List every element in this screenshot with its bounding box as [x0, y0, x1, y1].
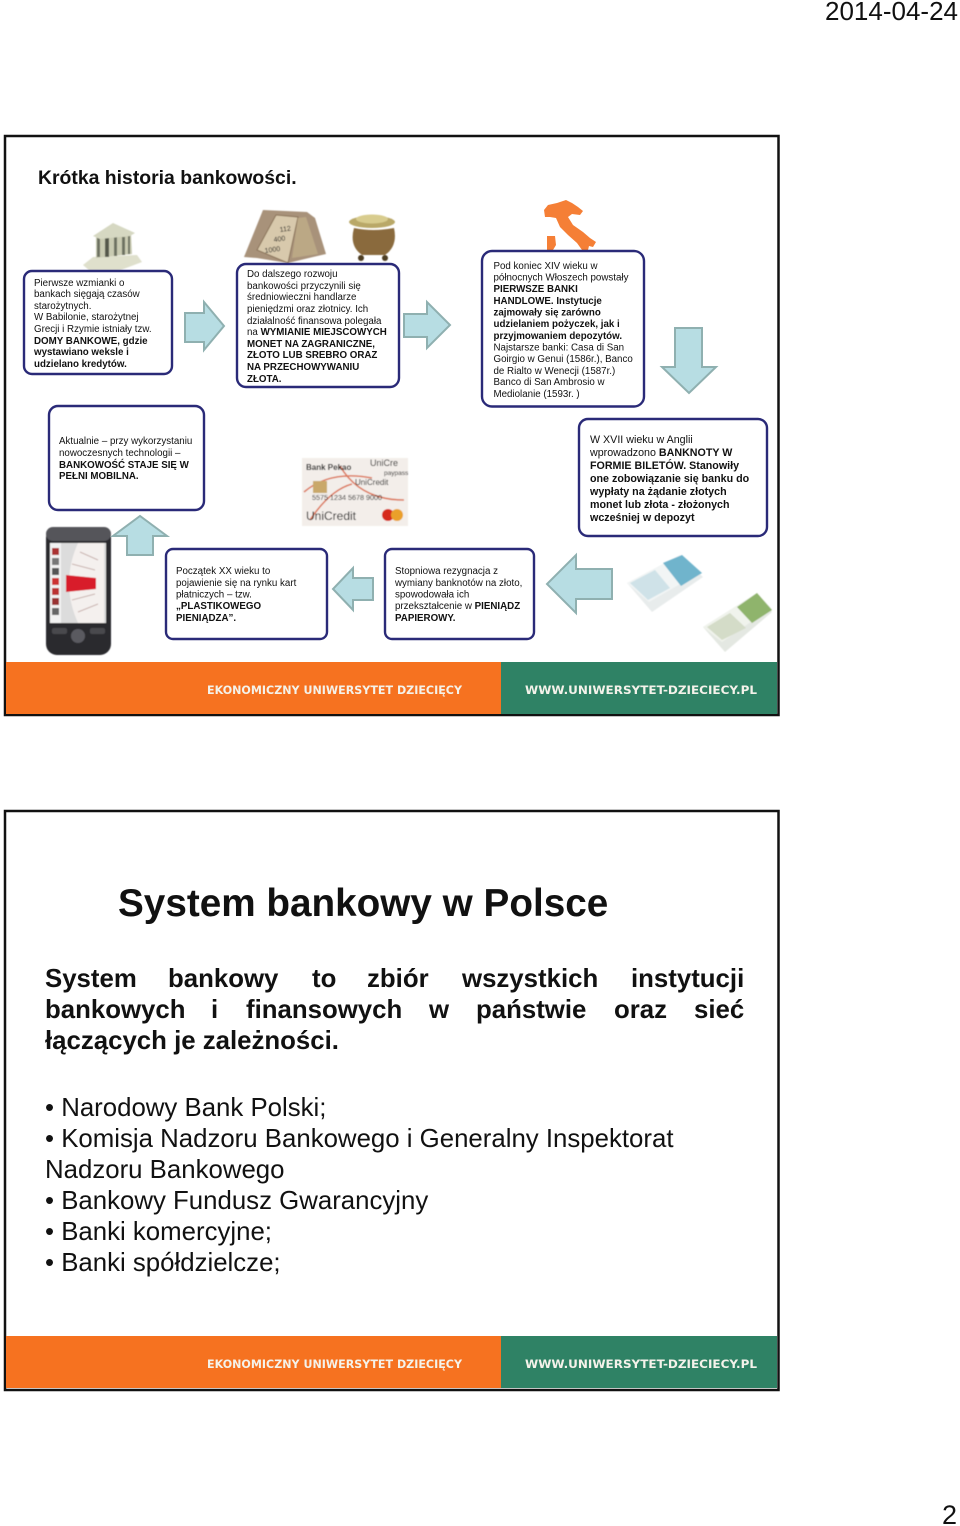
icon: map of Italy [544, 200, 596, 250]
text box: medieval money changers: NA PRZECHOWYWANIU [247, 362, 359, 373]
definition paragraph: wszystkich [461, 965, 598, 993]
arrow: left large [547, 555, 612, 613]
text box: medieval money changers: MONET NA ZAGRANICZNE, [247, 339, 375, 350]
text box: paper money: wymiany banknotów na złoto, [394, 578, 522, 589]
icon: payment card [302, 458, 409, 526]
text box: mobile banking: Aktualnie – przy wykorzystaniu [59, 436, 192, 447]
arrow: left small [333, 568, 373, 610]
icon: pot of gold [349, 214, 395, 261]
icon: gold bars: 112 [279, 225, 291, 234]
bullet list: • Bankowy Fundusz Gwarancyjny [45, 1187, 428, 1215]
definition paragraph: oraz [614, 996, 667, 1024]
bullet list: • Narodowy Bank Polski; [45, 1094, 326, 1122]
text box: paper money: spowodowała ich [395, 590, 469, 600]
text box: ancient banks: udzielano kredytów. [34, 359, 127, 370]
title: Krótka historia bankowości. [38, 167, 297, 189]
heading: System bankowy w Polsce [118, 882, 608, 925]
text box: ancient banks: bankach sięgają czasów [34, 289, 141, 300]
text box: first merchant banks: udzielaniem pożyczek, jak i [494, 319, 620, 330]
definition paragraph: bankowy [168, 965, 279, 993]
text box: medieval money changers: ZŁOTO LUB SREBRO ORAZ [247, 350, 377, 361]
text box: banknotes as tickets: W XVII wieku w Anglii [590, 434, 693, 446]
text box: ancient banks: starożytnych. [34, 301, 91, 312]
definition paragraph: bankowych [45, 996, 186, 1024]
text box: paper money: przekształcenie w PIENIĄDZ [395, 601, 520, 612]
icon: bank building [83, 223, 142, 271]
icon: payment card: UniCredit [306, 509, 357, 523]
footer band: WWW.UNIWERSYTET-DZIECIECY.PL [525, 1357, 758, 1371]
icon: payment card: Bank Pekao [306, 463, 351, 472]
text box: medieval money changers: pieniędzmi oraz złotnicy. Ich [247, 304, 368, 315]
text box: mobile banking: BANKOWOŚĆ STAJE SIĘ W [59, 459, 190, 471]
definition paragraph: i [211, 996, 218, 1024]
text box: plastic money: pojawienie się na rynku kart [176, 578, 297, 589]
text box: medieval money changers: na WYMIANIE MIEJSCOWYCH [247, 327, 387, 338]
text box: paper money: PAPIEROWY. [395, 613, 456, 624]
text box: banknotes as tickets: wypłaty na żądanie złotych [589, 486, 727, 498]
text box: medieval money changers: bankowości przyczynili się [247, 281, 361, 292]
text box: medieval money changers [237, 264, 399, 387]
definition paragraph: zbiór [367, 965, 429, 993]
text box: medieval money changers: Do dalszego rozwoju [247, 269, 338, 280]
text box: ancient banks [24, 271, 172, 374]
panel: slide 2 banking system in Poland [5, 811, 778, 1390]
definition paragraph: sieć [694, 996, 744, 1024]
icon: payment card: UniCre [370, 458, 398, 468]
text box: banknotes as tickets: monet lub złota - złożonych [590, 499, 730, 511]
icon: banknote stack green [703, 593, 772, 652]
text box: mobile banking: PEŁNI MOBILNA. [59, 471, 139, 482]
text box: medieval money changers: działalność finansowa polegała [247, 316, 382, 327]
icon: gold bars [244, 210, 326, 263]
text box: first merchant banks: HANDLOWE. Instytucje [494, 296, 602, 307]
footer band [6, 662, 777, 714]
footer band: WWW.UNIWERSYTET-DZIECIECY.PL [525, 683, 758, 697]
footer band: EKONOMICZNY UNIWERSYTET DZIECIĘCY [207, 683, 463, 697]
text box: first merchant banks: Mediolanie (1593r. ) [494, 389, 580, 400]
text box: first merchant banks: Najstarsze banki: Casa di San [494, 342, 624, 354]
arrow: up [113, 516, 167, 555]
text box: first merchant banks: Pod koniec XIV wieku w [494, 261, 599, 272]
text box: first merchant banks: Goirgio w Genui (1586r.), Banco [494, 354, 633, 365]
definition paragraph: państwie [476, 996, 586, 1024]
text box: first merchant banks: przyjmowaniem depozytów. [494, 331, 622, 342]
definition paragraph: łączących je zależności. [45, 1027, 339, 1055]
text box: banknotes as tickets: one zobowiązanie się banku do [590, 473, 750, 485]
icon: banknote stack blue [627, 555, 703, 612]
icon: payment card: UniCredit [355, 478, 389, 487]
icon: payment card: paypass [384, 470, 409, 477]
text box: plastic money: PIENIĄDZA”. [176, 613, 236, 624]
text box: paper money: Stopniowa rezygnacja z [395, 566, 498, 577]
text box: banknotes as tickets: FORMIE BILETÓW. Stanowiły [590, 459, 739, 472]
bullet list: • Banki spółdzielcze; [45, 1249, 281, 1277]
text box: paper money [385, 549, 534, 639]
definition paragraph [45, 965, 744, 1055]
text box: ancient banks: wystawiano weksle i [33, 347, 129, 358]
text box: plastic money [166, 549, 327, 639]
text box: first merchant banks [482, 251, 644, 406]
text box: banknotes as tickets: wcześniej w depozyt [589, 512, 695, 524]
text box: mobile banking [49, 406, 204, 510]
bullet list: Nadzoru Bankowego [45, 1156, 284, 1184]
text box: banknotes as tickets [579, 419, 767, 536]
definition paragraph: to [312, 965, 336, 993]
text box: ancient banks: DOMY BANKOWE, gdzie [34, 336, 148, 347]
arrow: right 1 [185, 302, 224, 350]
icon: smartphone [46, 527, 111, 655]
text box: plastic money: płatniczych – tzw. [176, 590, 252, 600]
definition paragraph: System [45, 965, 137, 993]
text box: first merchant banks: de Rialto w Wenecji (1587r.) [494, 366, 615, 377]
text box: first merchant banks: PIERWSZE BANKI [494, 284, 578, 295]
text box: medieval money changers: ZŁOTA. [247, 374, 282, 385]
text box: mobile banking: nowoczesnych technologii – [59, 448, 181, 459]
definition paragraph: finansowych [246, 996, 402, 1024]
text box: first merchant banks: Banco di San Ambrosio w [494, 377, 606, 388]
text box: banknotes as tickets: wprowadzono BANKNOTY W [589, 447, 733, 459]
definition paragraph: w [428, 996, 450, 1024]
bullet list [45, 1094, 673, 1277]
panel: slide 1 history of banking [5, 136, 778, 715]
text box: plastic money: Początek XX wieku to [176, 566, 271, 577]
footer band: EKONOMICZNY UNIWERSYTET DZIECIĘCY [207, 1357, 463, 1371]
footer band [6, 1336, 777, 1388]
bullet list: • Banki komercyjne; [45, 1218, 272, 1246]
text box: ancient banks: W Babilonie, starożytnej [34, 312, 139, 323]
text box: ancient banks: Pierwsze wzmianki o [34, 278, 125, 289]
text box: medieval money changers: średniowieczni handlarze [247, 292, 356, 303]
icon: gold bars: 400 [273, 235, 286, 244]
icon: payment card: 5575 1234 5678 9000 [312, 493, 382, 502]
text box: ancient banks: Grecji i Rzymie istniały tzw. [34, 324, 152, 335]
arrow: right 2 [404, 302, 450, 348]
icon: gold bars: 1000 [264, 246, 281, 255]
text box: first merchant banks: północnych Włoszech powstały [494, 272, 629, 284]
text box: first merchant banks: zajmowały się zarówno [494, 308, 601, 318]
definition paragraph: instytucji [631, 965, 744, 993]
arrow: down [662, 328, 716, 393]
bullet list: • Komisja Nadzoru Bankowego i Generalny Inspektorat [45, 1125, 673, 1153]
text box: plastic money: „PLASTIKOWEGO [176, 601, 261, 612]
